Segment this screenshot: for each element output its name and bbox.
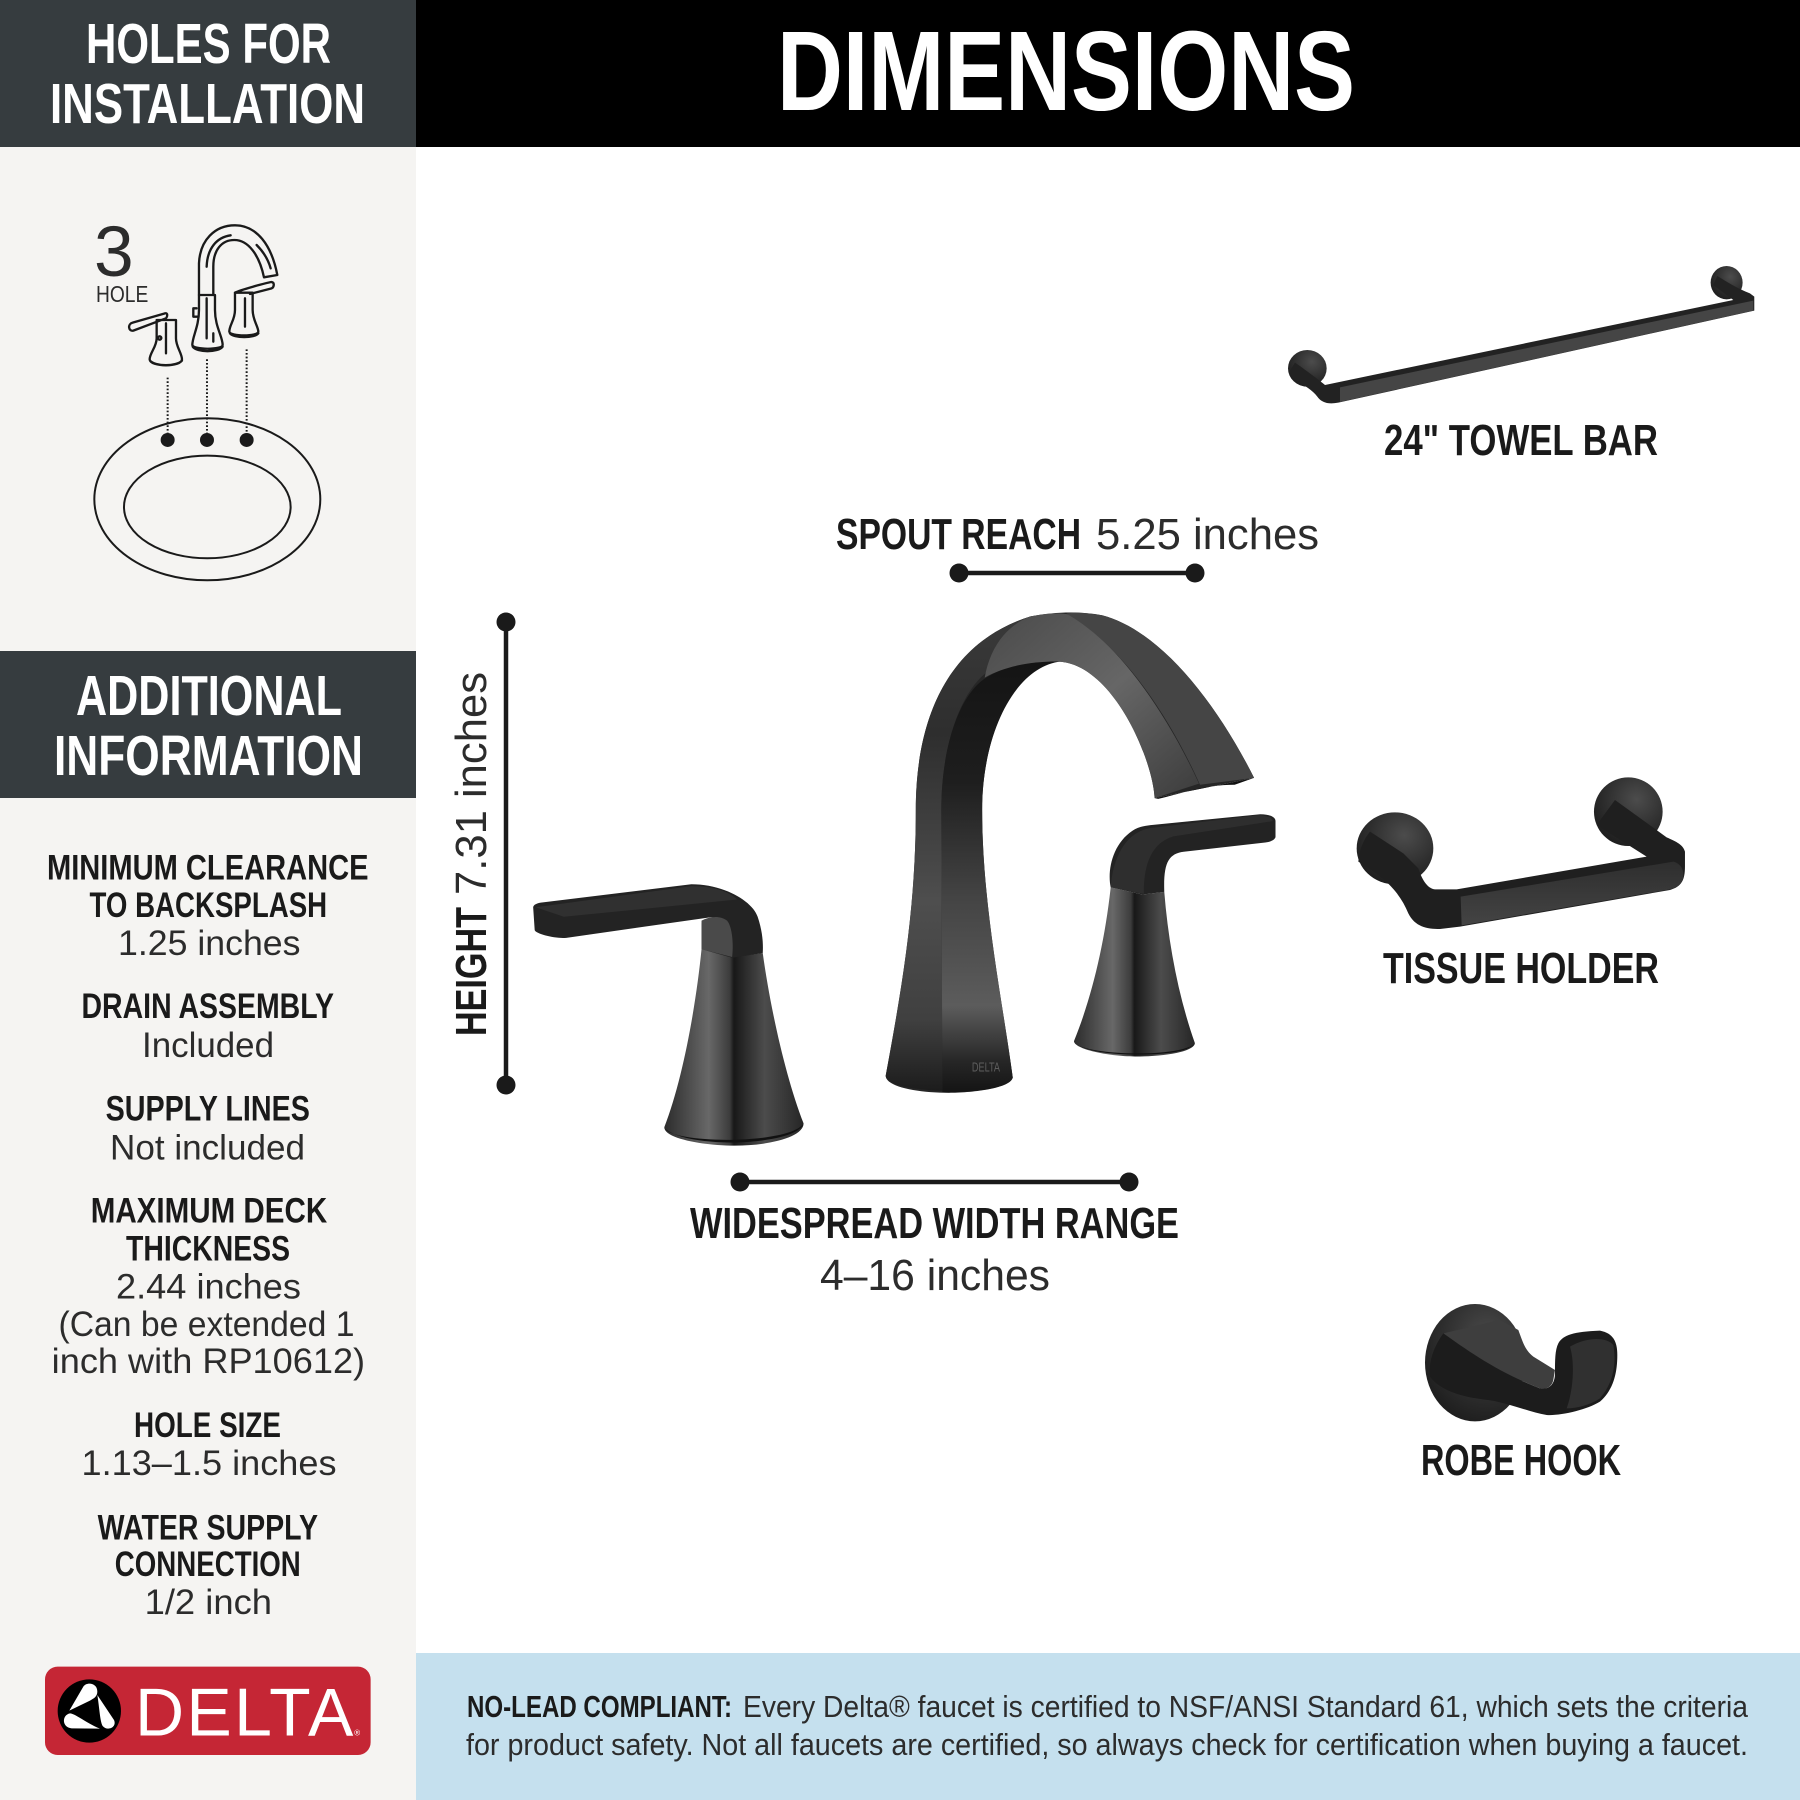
text block: water supply connection [98,1508,318,1622]
dimension: height [447,612,516,1094]
icon: three hole faucet and sink diagram [94,212,320,580]
heading: additional information: ADDITIONAL [76,664,342,728]
faucet: left handle [533,884,804,1146]
title: DIMENSIONS [777,8,1355,134]
text block: hole size: HOLE SIZE [134,1406,281,1445]
heading: additional information: INFORMATION [54,724,363,788]
text block: maximum deck thickness: inch with RP10612) [52,1342,365,1381]
text block: maximum deck thickness: 2.44 inches [116,1267,301,1306]
text block: maximum deck thickness: MAXIMUM DECK [91,1191,327,1230]
logo: delta: ® [354,1729,360,1738]
icon: delta emblem [58,1679,121,1743]
text block: drain assembly: DRAIN ASSEMBLY [82,987,334,1026]
faucet: right handle [1074,814,1276,1056]
logo: delta [45,1667,371,1755]
text block: water supply connection: 1/2 inch [145,1583,272,1622]
text block: minimum clearance: 1.25 inches [118,924,300,963]
text block: minimum clearance: MINIMUM CLEARANCE [47,848,368,887]
icon: towel bar [1288,266,1754,403]
panel: no-lead compliance note [416,1653,1800,1800]
text block: minimum clearance [47,848,368,963]
heading: additional information [0,651,416,798]
text block: maximum deck thickness: THICKNESS [126,1229,290,1268]
heading: holes for installation [0,0,416,147]
panel: title bar [416,0,1800,147]
label: 3 hole: HOLE [96,281,148,307]
text block: drain assembly: Included [142,1026,274,1065]
dimension: widespread width range: 4–16 inches [820,1251,1050,1300]
dimension: widespread width range [690,1172,1179,1300]
text block: water supply connection: CONNECTION [115,1545,301,1584]
text block: water supply connection: WATER SUPPLY [98,1508,318,1547]
icon: robe hook [1425,1304,1617,1421]
label: towel bar: 24" TOWEL BAR [1384,416,1658,465]
text block: supply lines: SUPPLY LINES [106,1089,310,1128]
text block: minimum clearance: TO BACKSPLASH [90,886,327,925]
dimension: widespread width range: WIDESPREAD WIDTH RANGE [690,1199,1179,1248]
icon: sink basin [94,418,320,580]
icon: tissue holder [1357,777,1685,929]
sidebar background [0,0,416,1800]
icon: line-art spout [129,225,277,365]
product: widespread faucet [533,612,1276,1146]
dimension: height: 7.31 inches [447,672,496,895]
text block: maximum deck thickness [52,1192,365,1381]
text block: maximum deck thickness: (Can be extended 1 [58,1305,354,1344]
text block: hole size: 1.13–1.5 inches [82,1444,336,1483]
dimension: spout reach: 5.25 inches [1096,510,1319,559]
label: tissue holder: TISSUE HOLDER [1383,944,1659,993]
faucet: spout: DELTA [972,1060,1000,1075]
label: robe hook: ROBE HOOK [1421,1436,1621,1485]
heading: holes for installation: INSTALLATION [50,72,365,136]
faucet: spout [886,612,1254,1093]
heading: holes for installation: HOLES FOR [86,12,331,76]
text block: supply lines: Not included [110,1128,305,1167]
text block: hole size [82,1406,336,1483]
dotted guide lines [168,349,247,433]
dimension: spout reach [836,510,1319,582]
text block: drain assembly [82,987,334,1065]
icon: mounting holes [161,433,254,447]
label: 3 hole [94,212,148,307]
logo: delta: DELTA [135,1675,354,1751]
panel: no-lead compliance note: NO-LEAD COMPLIANT: [467,1689,732,1724]
label: 3 hole: 3 [94,212,134,292]
dimension: spout reach: SPOUT REACH [836,510,1081,559]
dimension: height: HEIGHT [447,907,496,1036]
text block: supply lines [106,1089,310,1167]
